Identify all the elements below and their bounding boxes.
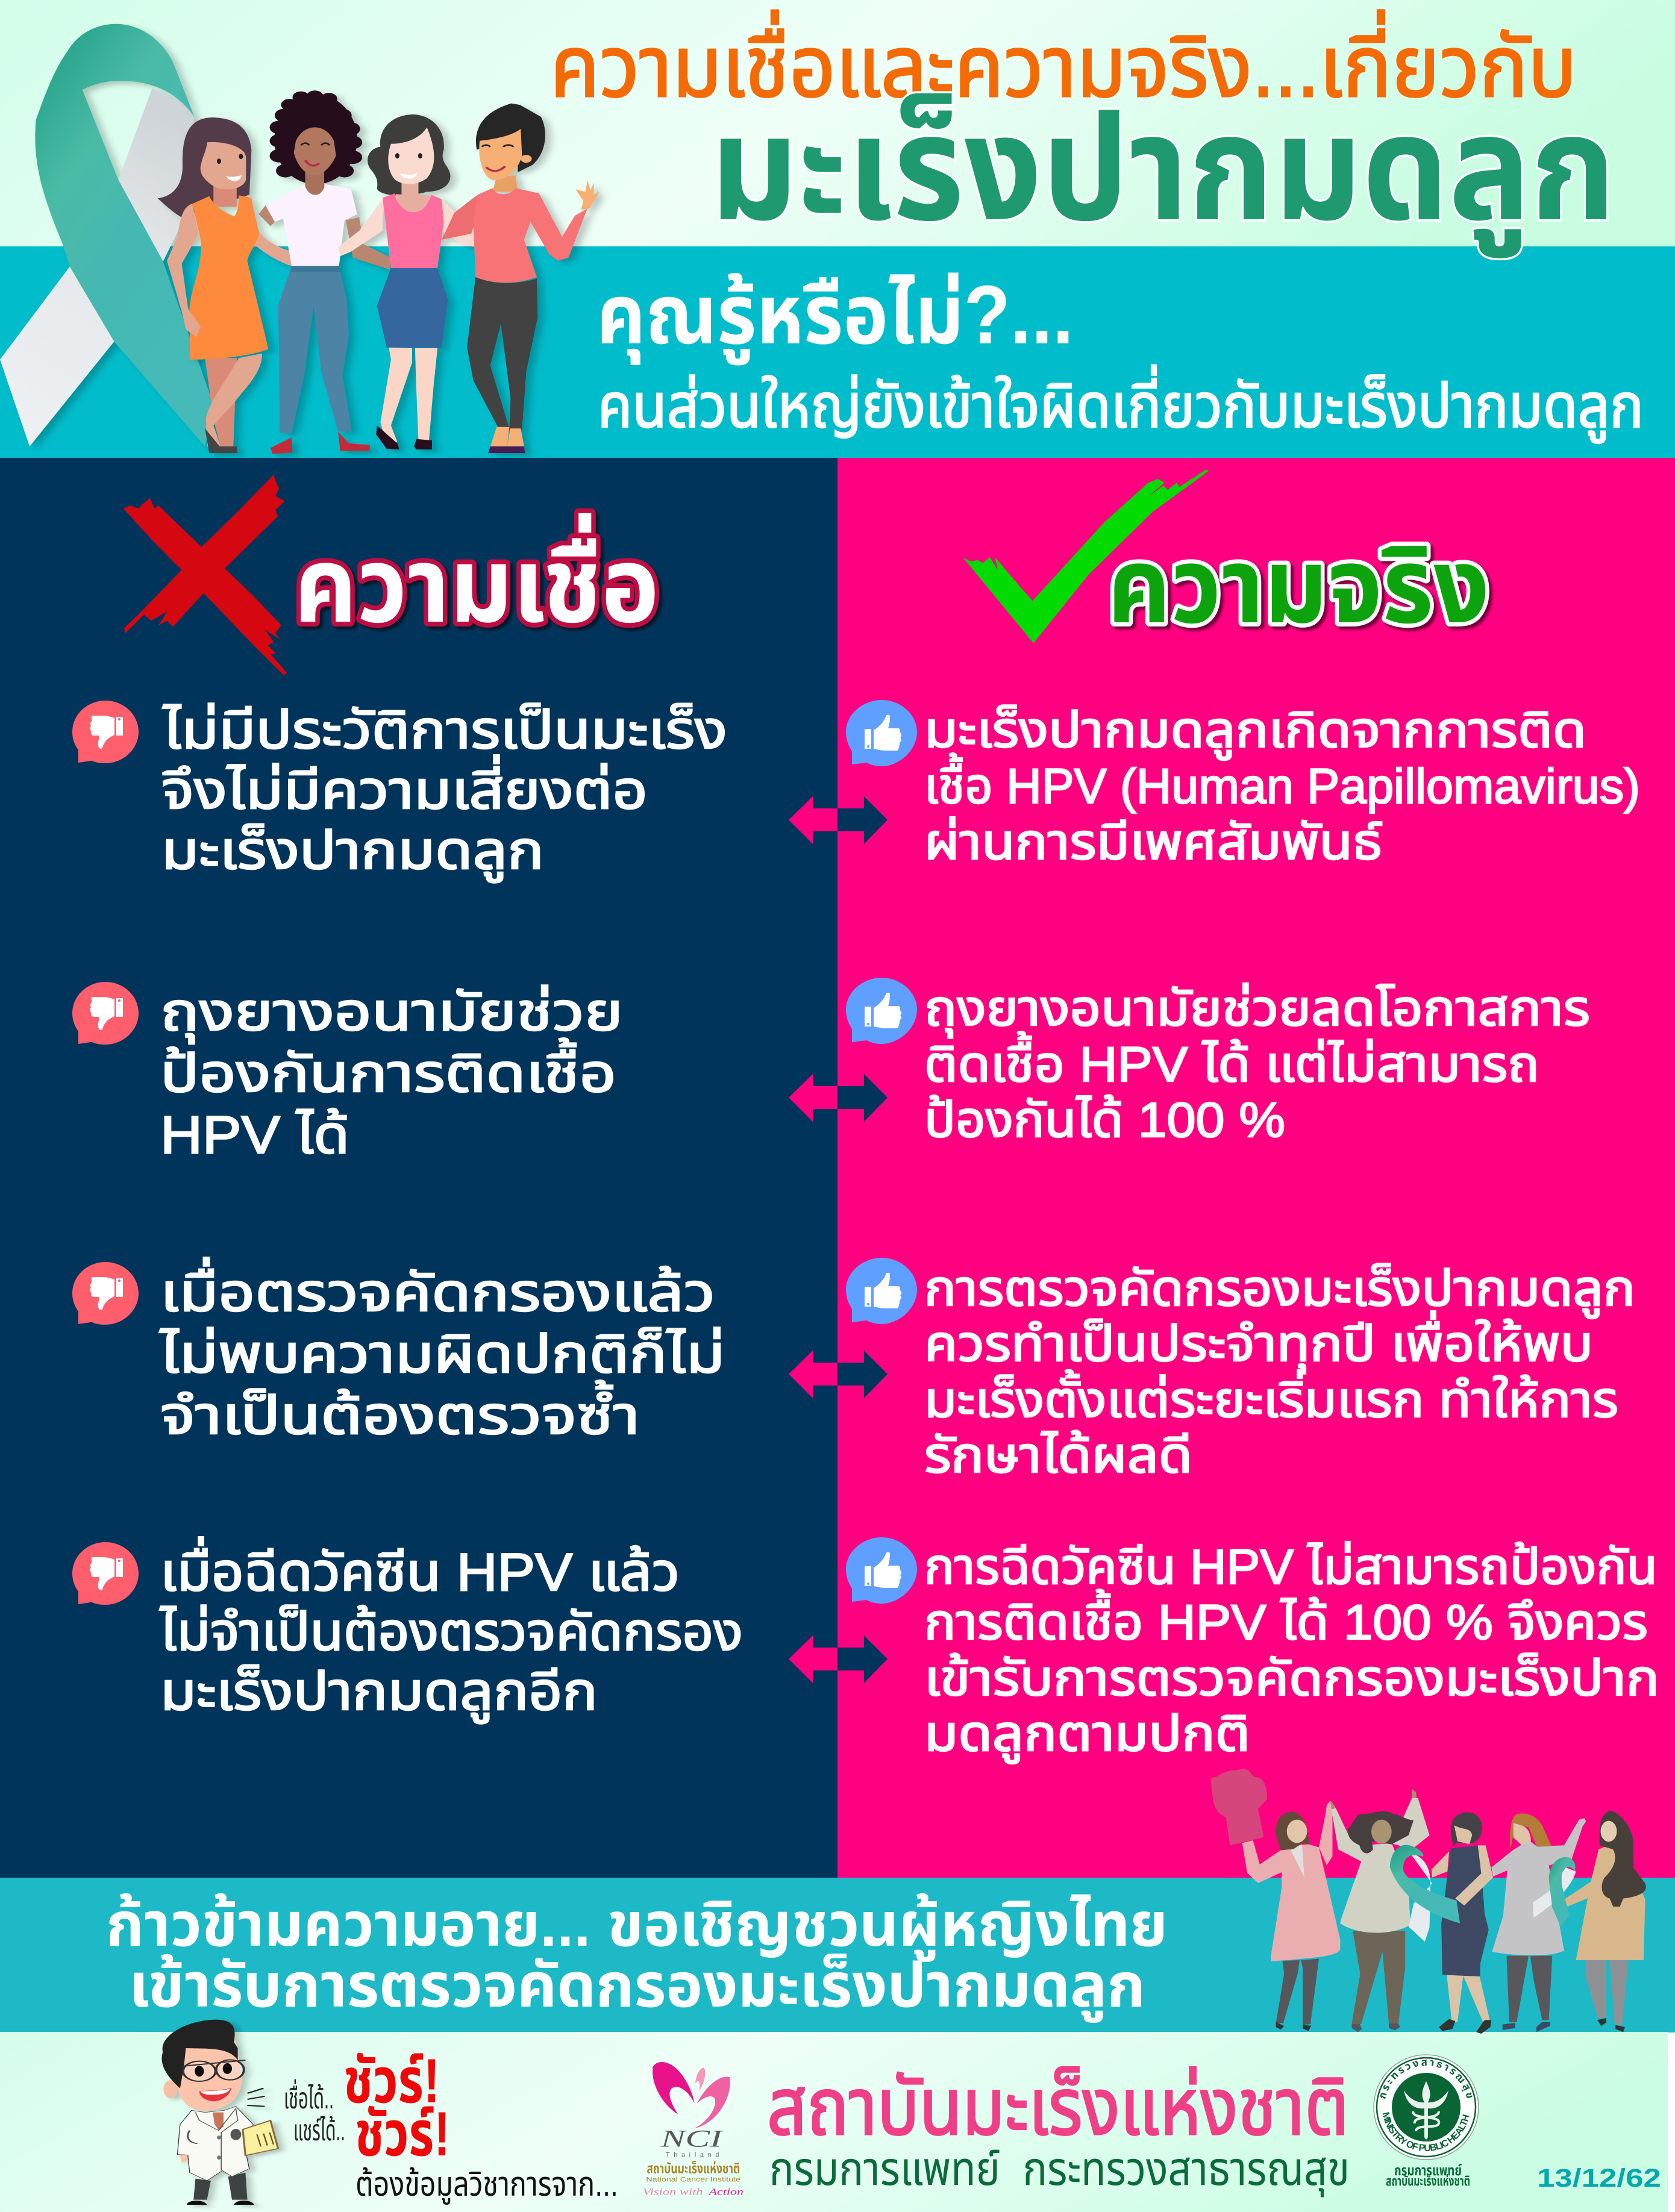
icon: thumbs down bbox=[72, 701, 139, 763]
share text: แชร์ได้.. bbox=[293, 2115, 345, 2147]
icon: thumbs down bbox=[72, 1262, 139, 1325]
call to action line 2: เข้ารับการตรวจคัดกรองมะเร็งปากมดลูก bbox=[129, 1951, 1145, 2023]
title line 2: มะเร็งปากมดลูก bbox=[710, 86, 1616, 258]
logo: National Cancer Institute: สถาบันมะเร็งแห่งชาติ bbox=[647, 2160, 740, 2176]
fact 3 text: รักษาได้ผลดี bbox=[924, 1428, 1192, 1483]
panel: facts background bbox=[838, 458, 1675, 1878]
myth 2 bbox=[72, 982, 623, 1164]
source text: ต้องข้อมูลวิชาการจาก... bbox=[355, 2165, 618, 2205]
did you know heading: คุณรู้หรือไม่?... bbox=[596, 269, 1074, 366]
heading: myth: ความเชื่อ bbox=[294, 513, 659, 644]
emblem caption bbox=[1386, 2163, 1470, 2189]
myth 4 text: ไม่จำเป็นต้องตรวจคัดกรอง bbox=[159, 1602, 743, 1661]
fact 3 text: ควรทำเป็นประจำทุกปี เพื่อให้พบ bbox=[924, 1311, 1593, 1374]
woman in navy dress bbox=[1432, 1812, 1493, 2034]
icon: green check bbox=[963, 469, 1209, 643]
ribbon held right bbox=[1533, 1857, 1576, 1926]
icon: awareness ribbon bbox=[0, 24, 213, 446]
arrow 3 bbox=[789, 1351, 888, 1398]
icon: thumbs up bbox=[846, 700, 917, 766]
fact 4 text bbox=[924, 1540, 1659, 1764]
fact 1 bbox=[846, 700, 1640, 870]
woman in orange dress bbox=[158, 117, 292, 453]
fact 2 text: ป้องกันได้ 100 % bbox=[924, 1093, 1285, 1148]
fact 3 text: มะเร็งตั้งแต่ระยะเริ่มแรก ทำให้การ bbox=[924, 1370, 1618, 1428]
myth 3 bbox=[72, 1257, 725, 1445]
fact 4 text: มดลูกตามปกติ bbox=[924, 1707, 1250, 1764]
myth 1 text: จึงไม่มีความเสี่ยงต่อ bbox=[161, 755, 648, 820]
fact 2 text bbox=[924, 981, 1590, 1148]
ribbon held left bbox=[1390, 1845, 1460, 1942]
fact 4 text: การฉีดวัคซีน HPV ไม่สามารถป้องกัน bbox=[924, 1540, 1658, 1595]
woman in grey coat bbox=[1491, 1814, 1586, 2032]
fact 4 text: เข้ารับการตรวจคัดกรองมะเร็งปาก bbox=[924, 1651, 1659, 1706]
fact 3 text bbox=[924, 1261, 1635, 1483]
heading: fact: ความจริง bbox=[1107, 527, 1489, 645]
arrow 2 bbox=[789, 1074, 888, 1122]
fact 2 text: ถุงยางอนามัยช่วยลดโอกาสการ bbox=[924, 981, 1590, 1039]
woman in cream top bbox=[1330, 1789, 1430, 2032]
fact 1 text: ผ่านการมีเพศสัมพันธ์ bbox=[924, 815, 1382, 870]
teal header band bbox=[0, 246, 1675, 458]
fact 1 text: มะเร็งปากมดลูกเกิดจากการติด bbox=[924, 703, 1586, 760]
logo: National Cancer Institute: National Cancer Institute bbox=[646, 2176, 740, 2184]
date: 13/12/62 bbox=[1537, 2164, 1661, 2193]
fact 1 text bbox=[924, 703, 1640, 870]
slogan bbox=[284, 2046, 618, 2205]
right edge strip bbox=[1668, 2032, 1675, 2212]
icon: thumbs down bbox=[72, 1542, 139, 1605]
title line 1: ความเชื่อและความจริง...เกี่ยวกับ bbox=[550, 10, 1577, 115]
logo: National Cancer Institute: NCI bbox=[660, 2125, 724, 2152]
myth 4 text bbox=[159, 1537, 743, 1723]
myth 3 text: เมื่อตรวจคัดกรองแล้ว bbox=[160, 1257, 715, 1322]
call to action band bbox=[0, 1878, 1675, 2032]
logo: National Cancer Institute: Thailand bbox=[666, 2152, 719, 2159]
icon: thumbs up bbox=[846, 1258, 917, 1324]
myth 1 text: มะเร็งปากมดลูก bbox=[161, 820, 544, 883]
logo: Ministry of Public Health emblem: กระทรวงสาธารณสุข bbox=[1380, 2059, 1473, 2099]
fact 4 text: การติดเชื้อ HPV ได้ 100 % จึงควร bbox=[924, 1589, 1648, 1650]
header background bbox=[0, 0, 1675, 247]
myth 3 text: จำเป็นต้องตรวจซ้ำ bbox=[160, 1380, 640, 1445]
institute name: สถาบันมะเร็งแห่งชาติ bbox=[767, 2063, 1349, 2151]
arrow 1 bbox=[789, 796, 888, 844]
fact 3 text: การตรวจคัดกรองมะเร็งปากมดลูก bbox=[924, 1261, 1635, 1319]
fact 2 text: ติดเชื้อ HPV ได้ แต่ไม่สามารถ bbox=[924, 1031, 1539, 1092]
logo: National Cancer Institute: Action bbox=[708, 2187, 744, 2197]
myth 1 text bbox=[161, 700, 727, 883]
myth 2 text: ป้องกันการติดเชื้อ bbox=[160, 1038, 616, 1103]
myth 2 text: HPV ได้ bbox=[160, 1105, 349, 1164]
logo: Ministry of Public Health emblem bbox=[1373, 2054, 1479, 2160]
icon: thumbs down bbox=[72, 982, 139, 1045]
myth 2 text bbox=[160, 982, 623, 1164]
myth 3 text bbox=[159, 1257, 725, 1445]
arrow 4 bbox=[789, 1636, 888, 1683]
title bbox=[550, 10, 1616, 258]
woman in white t-shirt bbox=[258, 90, 391, 454]
call to action text bbox=[106, 1890, 1168, 2023]
myth 4 bbox=[72, 1537, 743, 1723]
myth 3 text: ไม่พบความผิดปกติก็ไม่ bbox=[159, 1324, 725, 1384]
myth 2 text: ถุงยางอนามัยช่วย bbox=[160, 982, 623, 1044]
panel: myths background bbox=[0, 458, 838, 1878]
logo: National Cancer Institute bbox=[643, 2062, 744, 2197]
myth 4 text: มะเร็งปากมดลูกอีก bbox=[160, 1661, 598, 1723]
emblem caption: สถาบันมะเร็งแห่งชาติ bbox=[1386, 2173, 1470, 2189]
icon: thumbs up bbox=[846, 978, 917, 1044]
fact 1 text: เชื้อ HPV (Human Papillomavirus) bbox=[924, 753, 1640, 814]
believe text: เชื่อได้.. bbox=[284, 2079, 334, 2115]
icon: thumbs up bbox=[846, 1537, 917, 1604]
illustration: four women bbox=[158, 90, 600, 454]
myth 1 text: ไม่มีประวัติการเป็นมะเร็ง bbox=[162, 700, 727, 760]
illustration: doctor mascot bbox=[162, 2020, 278, 2205]
woman in pink coat bbox=[1242, 1801, 1340, 2031]
footer background bbox=[0, 2032, 1668, 2212]
woman in salmon sweater bbox=[442, 104, 600, 453]
logo: National Cancer Institute: Vision with bbox=[643, 2187, 703, 2197]
logo: Ministry of Public Health emblem: MINISTRY OF PUBLIC HEALTH bbox=[1382, 2112, 1470, 2152]
illustration: five women with ribbons bbox=[1210, 1769, 1646, 2034]
sure 2: ชัวร์! bbox=[355, 2099, 450, 2169]
department name: กรมการแพทย์ กระทรวงสาธารณสุข bbox=[769, 2142, 1350, 2198]
raised fist bbox=[1210, 1769, 1267, 1845]
call to action line 1: ก้าวข้ามความอาย... ขอเชิญชวนผู้หญิงไทย bbox=[106, 1890, 1168, 1962]
intro text bbox=[596, 269, 1644, 443]
myth 4 text: เมื่อฉีดวัคซีน HPV แล้ว bbox=[160, 1537, 680, 1602]
fact 3 bbox=[846, 1258, 1635, 1483]
woman in tan coat bbox=[1564, 1811, 1646, 2032]
sure 1: ชัวร์! bbox=[343, 2046, 440, 2116]
icon: red cross bbox=[124, 475, 287, 675]
fact 4 bbox=[846, 1537, 1659, 1764]
woman in pink top bbox=[338, 114, 482, 449]
myth 1 bbox=[72, 700, 727, 883]
emblem caption: กรมการแพทย์ bbox=[1394, 2163, 1462, 2179]
fact 2 bbox=[846, 978, 1590, 1148]
